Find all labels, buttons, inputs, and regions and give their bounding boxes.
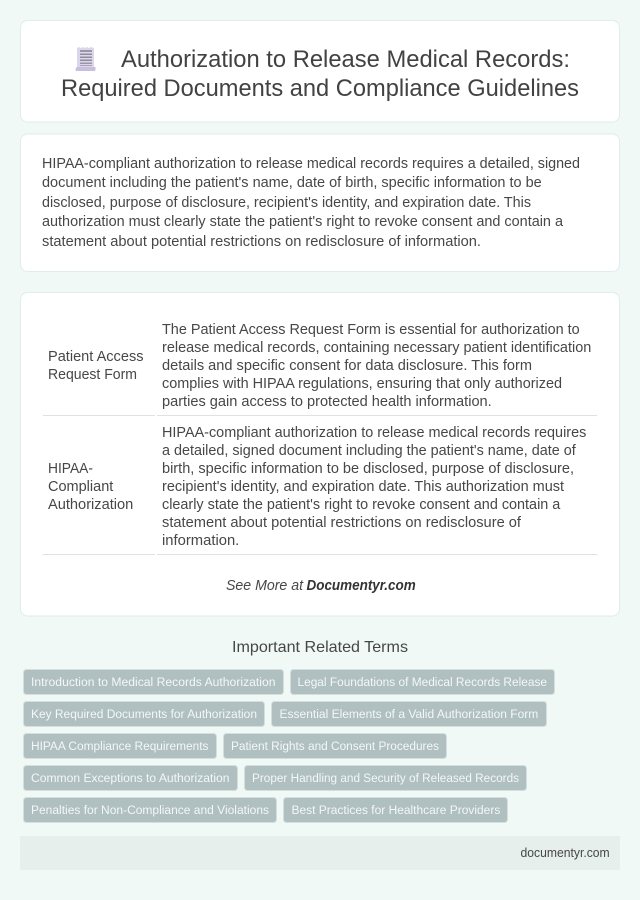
title text: Authorization to Release Medical Records:: [121, 46, 570, 73]
row description: information.: [162, 533, 239, 549]
title text: Required Documents and Compliance Guidelines: [61, 75, 579, 102]
introduction paragraph: HIPAA-compliant authorization to release medical records requires a detailed, signed: [42, 156, 580, 172]
see more link: See More at: [226, 578, 304, 594]
panel: documents table: [20, 292, 620, 616]
row description: parties gain access to protected health information.: [162, 394, 492, 410]
row label: Request Form: [48, 367, 137, 383]
row description: statement about potential restrictions on redisclosure of: [162, 515, 522, 531]
see more link: Documentyr.com: [306, 578, 416, 594]
footer site name: documentyr.com: [520, 846, 610, 860]
tag: [24, 766, 238, 790]
tag: Best Practices for Healthcare Providers: [292, 803, 500, 817]
tag: [284, 798, 508, 822]
tag: [272, 702, 546, 726]
tag: [244, 766, 526, 790]
heading: important related terms: Important Related Terms: [232, 639, 408, 656]
tag: HIPAA Compliance Requirements: [31, 739, 208, 753]
introduction paragraph: statement about potential restrictions on redisclosure of information.: [42, 234, 481, 250]
row description: a detailed, signed document including the patient's name, date of: [162, 443, 577, 459]
title text: [61, 46, 579, 102]
table row: HIPAA-Compliant Authorization: [48, 425, 586, 549]
tag: Legal Foundations of Medical Records Release: [298, 675, 547, 689]
row description: complies with HIPAA regulations, ensuring that only authorized: [162, 376, 562, 392]
introduction paragraph: document including the patient's name, date of birth, specific information to be: [42, 175, 542, 191]
tag: Penalties for Non-Compliance and Violations: [31, 803, 269, 817]
tag: [24, 670, 284, 694]
row label: HIPAA-: [48, 461, 93, 477]
tag: [24, 734, 216, 758]
tag: Proper Handling and Security of Released Records: [252, 771, 519, 785]
tag: Common Exceptions to Authorization: [31, 771, 230, 785]
see more link: [226, 578, 416, 594]
tag: [24, 798, 276, 822]
tag: Patient Rights and Consent Procedures: [231, 739, 439, 753]
footer bar: [20, 836, 620, 870]
row label: Authorization: [48, 497, 133, 513]
introduction paragraph: disclosed, purpose of disclosure, recipient's identity, and expiration date. This: [42, 195, 531, 211]
row description: The Patient Access Request Form is essential for authorization to: [162, 322, 580, 338]
panel: introduction: [20, 134, 620, 272]
row description: HIPAA-compliant authorization to release medical records requires: [162, 425, 586, 441]
tag: Introduction to Medical Records Authorization: [31, 675, 276, 689]
row description: release medical records, containing necessary patient identification: [162, 340, 591, 356]
row description: [162, 322, 591, 410]
tag: [290, 670, 554, 694]
row label: Patient Access: [48, 349, 144, 365]
tag: [24, 702, 264, 726]
row description: recipient's identity, and expiration date. This authorization must: [162, 479, 564, 495]
panel: title: [20, 20, 620, 122]
icon: document receipt: [76, 47, 96, 71]
tag: Essential Elements of a Valid Authorization Form: [280, 707, 538, 721]
introduction paragraph: authorization must clearly state the patient's right to revoke consent and contain a: [42, 214, 563, 230]
introduction paragraph: [42, 156, 580, 250]
table row: Patient Access Request Form: [48, 322, 591, 410]
row description: birth, specific information to be disclosed, purpose of disclosure,: [162, 461, 574, 477]
row label: [48, 349, 144, 383]
tag: [224, 734, 446, 758]
tag list: related terms: [24, 670, 554, 822]
row description: [162, 425, 586, 549]
tag: Key Required Documents for Authorization: [31, 707, 257, 721]
row label: [48, 461, 133, 513]
row description: details and specific consent for data disclosure. This form: [162, 358, 532, 374]
row description: clearly state the patient's right to revoke consent and contain a: [162, 497, 560, 513]
row label: Compliant: [48, 479, 113, 495]
